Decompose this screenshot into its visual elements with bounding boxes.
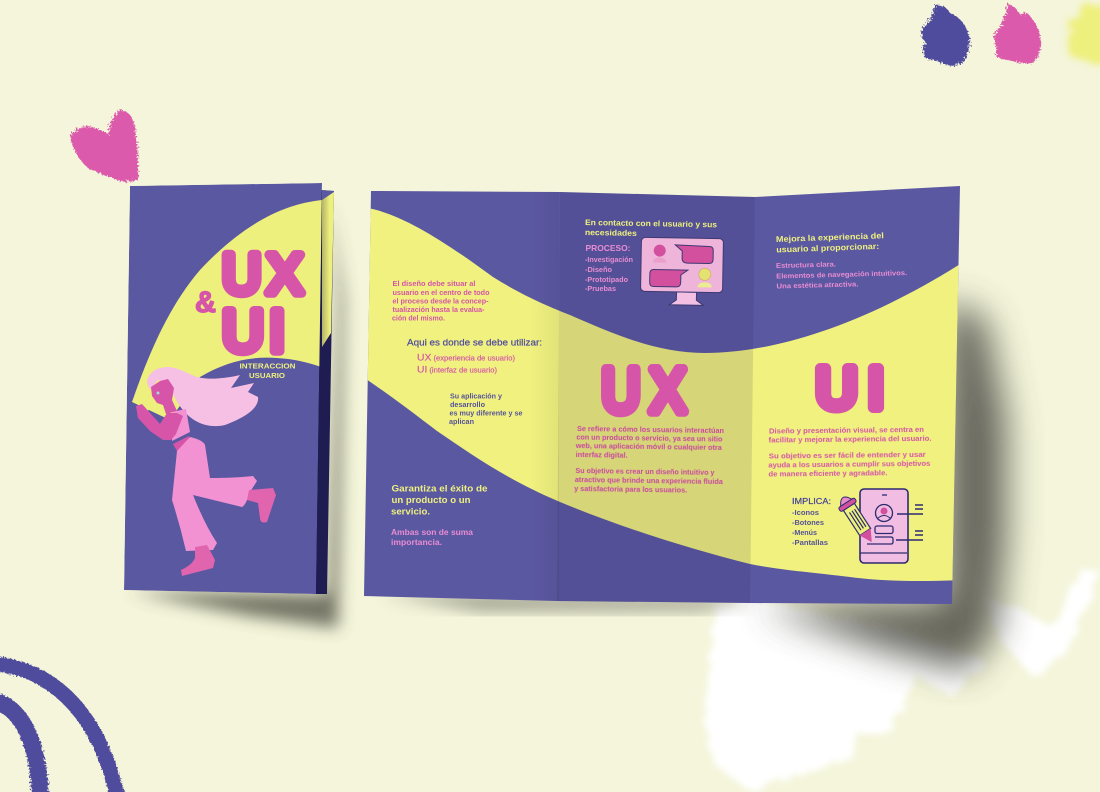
paragraph: aplicacion: desarrollo <box>450 402 485 409</box>
arms <box>136 404 183 440</box>
paragraph: se refiere: interfaz digital. <box>576 452 628 460</box>
heading: en contacto: necesidades <box>585 228 638 238</box>
paragraph: diseño visual <box>768 427 932 445</box>
subtitle: INTERACCION <box>240 362 296 370</box>
list: proceso: -Prototipado <box>585 277 628 284</box>
subtitle: USUARIO <box>249 371 285 380</box>
list: implica: IMPLICA: <box>792 497 831 506</box>
pants <box>172 437 257 551</box>
heading: mejora: Mejora la experiencia del <box>776 231 884 244</box>
front cover <box>124 183 324 594</box>
paragraph: aplicacion: es muy diferente y se <box>450 410 523 418</box>
paragraph: diseño visual: facilitar y mejorar la experiencia del usuario. <box>769 436 932 445</box>
list: implica <box>792 497 831 547</box>
paragraph: diseño: el proceso desde la concep- <box>392 298 489 306</box>
front boot <box>181 545 215 576</box>
paragraph: aplicacion: Su aplicación y <box>450 394 502 400</box>
large UI: UI <box>816 356 884 420</box>
paragraph: ambas <box>391 528 474 547</box>
list: implica: -Iconos <box>792 510 819 517</box>
icon: monitor with chat <box>640 237 723 306</box>
list: UX UI: UI (interfaz de usuario) <box>417 364 497 376</box>
paragraph: ambas: Ambas son de suma <box>391 528 474 537</box>
large UX: UX <box>602 357 686 425</box>
list: estructura: Estructura clara. <box>776 261 836 270</box>
list: estructura <box>776 260 908 290</box>
eye <box>156 392 160 394</box>
list: proceso: -Pruebas <box>585 286 616 293</box>
list: proceso: PROCESO: <box>586 243 631 253</box>
pencil <box>835 492 880 547</box>
character illustration <box>135 367 276 576</box>
list: implica: -Menús <box>792 530 817 537</box>
list: proceso: -Diseño <box>585 267 612 274</box>
paint arcs <box>0 664 118 792</box>
paragraph: diseño: tualización hasta la evalua- <box>392 307 485 314</box>
heading: garantiza: Garantiza el éxito de <box>392 484 488 494</box>
face <box>151 379 177 414</box>
paint swatch: yellow <box>1066 3 1100 68</box>
subtitle <box>240 362 296 380</box>
heading: garantiza: un producto o un <box>392 495 471 506</box>
shadow of open brochure <box>380 300 1006 672</box>
heading: en contacto <box>585 218 718 239</box>
list: proceso: -Investigación <box>585 257 633 264</box>
back flap <box>314 190 334 594</box>
paint swatch: purple <box>921 5 970 66</box>
yellow swoosh <box>132 200 324 420</box>
paragraph: se refiere: Se refiere a cómo los usuarios interactúan <box>577 426 724 435</box>
paragraph: su objetivo UI: ayuda a los usuarios a cumplir sus objetivos <box>768 461 930 470</box>
paint swatch: pink <box>993 4 1041 64</box>
list: UX UI: UX (experiencia de usuario) <box>417 352 515 364</box>
paragraph: se refiere <box>575 426 724 461</box>
paragraph: diseño: usuario en el centro de todo <box>392 290 490 297</box>
right panel top text <box>776 231 908 290</box>
paragraph: su objetivo UX: atractivo que brinde una experiencia fluida <box>575 477 723 486</box>
heading: donde utilizar: Aqui es donde se debe utilizar: <box>407 338 542 348</box>
paragraph: se refiere: web, una aplicación móvil o cualquier otra <box>575 443 722 452</box>
list: implica: -Pantallas <box>792 540 828 547</box>
list: estructura: Elementos de navegación intuitivos. <box>776 270 907 280</box>
waistband <box>173 436 190 451</box>
heading: mejora <box>776 231 884 254</box>
open brochure <box>350 180 970 610</box>
title UX: UX <box>222 242 303 305</box>
heading: garantiza: servicio. <box>391 506 430 518</box>
paragraph: su objetivo UI <box>768 452 931 479</box>
paragraph: aplicacion <box>449 394 523 426</box>
heading: en contacto: En contacto con el usuario y sus <box>585 218 718 229</box>
paragraph: diseño <box>392 281 490 322</box>
list: implica: -Botones <box>792 520 824 527</box>
paper and colour bands <box>350 180 970 610</box>
paragraph: su objetivo UI: Su objetivo es ser fácil de entender y usar <box>769 452 926 461</box>
left panel text <box>391 281 542 547</box>
paragraph: diseño: El diseño debe situar al <box>392 281 476 288</box>
centre panel top text <box>585 218 718 293</box>
paragraph: diseño: ción del mismo. <box>392 316 445 322</box>
heading: garantiza <box>391 484 488 518</box>
paragraph: su objetivo UX: y satisfactoria para los usuarios. <box>574 486 687 495</box>
shadow of closed brochure <box>130 200 344 628</box>
top <box>164 409 190 441</box>
white paint strokes <box>703 567 1100 792</box>
paragraph: su objetivo UI: de manera eficiente y agradable. <box>768 470 888 479</box>
paint heart <box>70 110 138 182</box>
title UI: UI <box>222 299 285 364</box>
title ampersand: & <box>195 286 216 319</box>
yellow phone glow <box>135 386 158 412</box>
list: estructura: Una estética atractiva. <box>776 281 859 290</box>
paragraph: se refiere: con un producto o servicio, ya sea un sitio <box>576 434 722 444</box>
paragraph: su objetivo UX: Su objetivo es crear un diseño intuitivo y <box>575 468 715 477</box>
closed brochure <box>124 183 334 594</box>
paragraph: su objetivo UX <box>574 468 723 495</box>
rear boot <box>247 488 276 522</box>
hair <box>147 367 258 426</box>
list: proceso <box>585 243 633 293</box>
list: UX UI <box>417 352 515 376</box>
centre panel shade <box>557 188 755 606</box>
paragraph: aplicacion: aplican <box>449 419 474 426</box>
paragraph: ambas: importancia. <box>391 538 442 547</box>
icon: phone with pencil <box>835 489 923 563</box>
centre panel paragraphs <box>574 426 724 495</box>
paragraph: diseño visual: Diseño y presentación visual, se centra en <box>769 427 924 435</box>
heading: mejora: usuario al proporcionar: <box>776 242 879 254</box>
fold shade <box>547 192 559 601</box>
right panel paragraphs <box>768 427 932 479</box>
